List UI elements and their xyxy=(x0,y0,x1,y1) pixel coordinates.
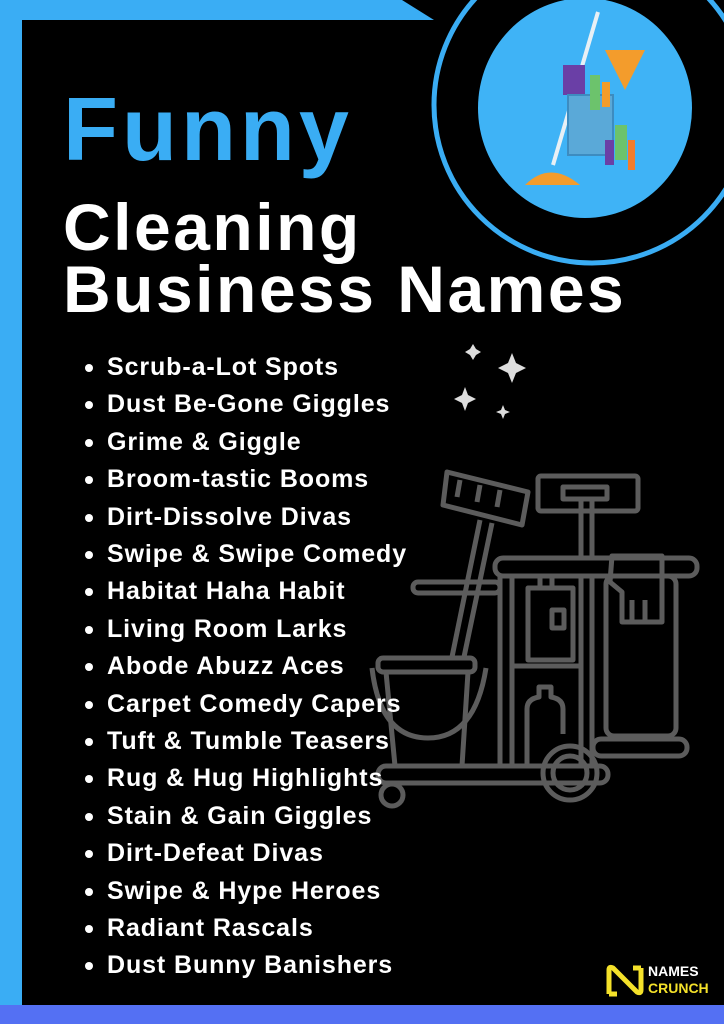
list: business names: Broom-tastic Booms xyxy=(107,465,369,493)
list: business names: Swipe & Hype Heroes xyxy=(107,877,381,905)
logo: NamesCrunch: CRUNCH xyxy=(648,980,709,996)
list: business names: Dirt-Dissolve Divas xyxy=(107,503,352,531)
list: business names: Swipe & Swipe Comedy xyxy=(107,540,407,568)
list: business names: Dust Be-Gone Giggles xyxy=(107,390,390,418)
list: business names: Habitat Haha Habit xyxy=(107,577,345,605)
list: business names: Dirt-Defeat Divas xyxy=(107,839,324,867)
list: business names: Living Room Larks xyxy=(107,615,347,643)
list: business names: Dust Bunny Banishers xyxy=(107,951,393,979)
list: business names: Stain & Gain Giggles xyxy=(107,802,372,830)
title: Cleaning: Cleaning xyxy=(63,190,362,264)
list: business names xyxy=(85,353,407,979)
list: business names: Radiant Rascals xyxy=(107,914,314,942)
logo: NamesCrunch xyxy=(606,963,709,996)
title: Business Names: Business Names xyxy=(63,252,626,326)
circle badge with cleaning supplies xyxy=(432,0,724,266)
list: business names: Rug & Hug Highlights xyxy=(107,764,383,792)
logo: NamesCrunch: NAMES xyxy=(648,963,699,979)
list: business names: Abode Abuzz Aces xyxy=(107,652,345,680)
list: business names: Grime & Giggle xyxy=(107,428,302,456)
illustration: cleaning cart xyxy=(370,470,700,808)
list: business names: Scrub-a-Lot Spots xyxy=(107,353,339,381)
icon: sparkles xyxy=(454,344,526,419)
title: Funny: Funny xyxy=(63,80,353,180)
list: business names: Carpet Comedy Capers xyxy=(107,690,401,718)
list: business names: Tuft & Tumble Teasers xyxy=(107,727,390,755)
